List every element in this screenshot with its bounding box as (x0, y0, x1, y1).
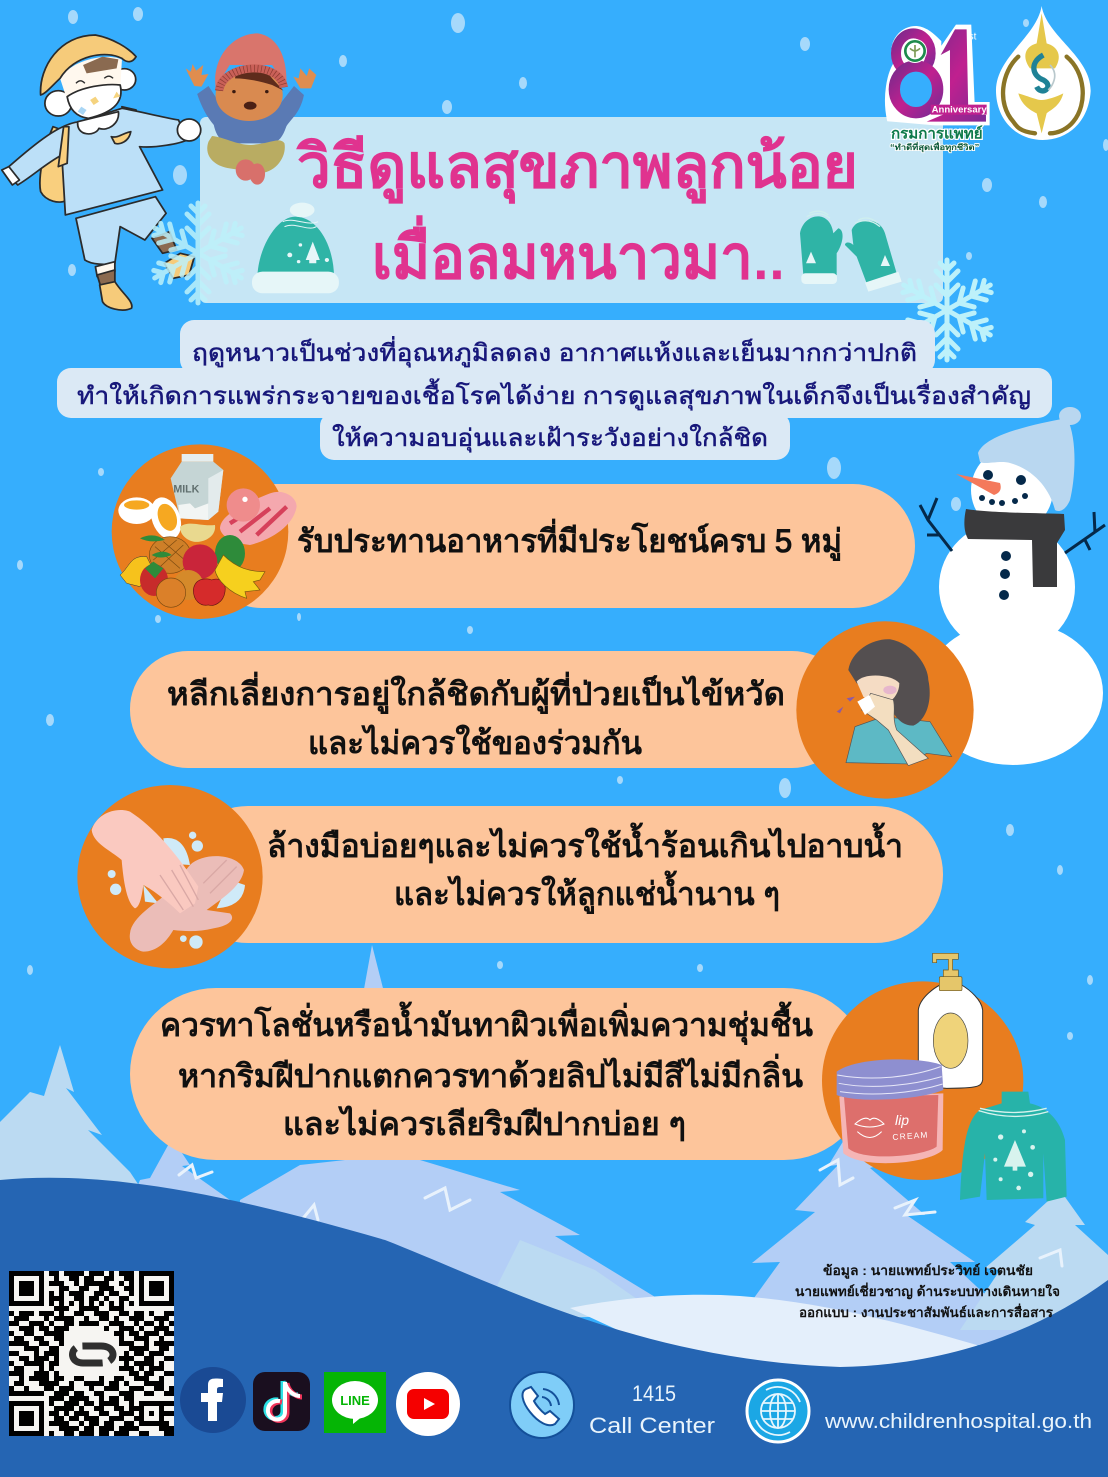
icon: teal mittens (800, 211, 902, 292)
tip 4 text line 1: ควรทาโลชั่นหรือน้ำมันทาผิวเพื่อเพิ่มความชุ่มชื้น (160, 1002, 813, 1045)
teal sweater (960, 1092, 1067, 1202)
lip cream jar: CREAM (892, 1130, 928, 1142)
snowman (920, 407, 1105, 765)
icon: LINE: LINE (340, 1393, 370, 1408)
tip 4 text line 3: และไม่ควรเลียริมฝีปากบ่อย ๆ (283, 1106, 686, 1142)
snowflake right (898, 260, 996, 360)
illustration: walking child with mask (2, 35, 201, 310)
lip cream jar: lip (895, 1112, 909, 1128)
tip 3: pill (180, 806, 943, 943)
icon: globe (747, 1380, 809, 1442)
logo: 81st anniversary department of medical services: กรมการแพทย์ (891, 124, 983, 142)
website address: www.childrenhospital.go.th (824, 1411, 1092, 1433)
tip 1 icon: food groups (112, 444, 297, 619)
tree squiggles (179, 1160, 1062, 1266)
credits text (795, 1263, 1060, 1320)
tip 3 text line 2: และไม่ควรให้ลูกแช่น้ำนาน ๆ (394, 871, 780, 914)
tip 4 icon: lotion, lip cream and sweater (822, 953, 1067, 1202)
intro text panel (57, 320, 1052, 460)
logo: 81st anniversary department of medical services: Anniversary (932, 104, 987, 114)
icon: phone (510, 1372, 574, 1438)
QR code (9, 1271, 174, 1436)
tip 2 text line 2: และไม่ควรใช้ของร่วมกัน (308, 725, 642, 761)
snowy pine trees (0, 945, 1108, 1345)
tip 2: pill (130, 651, 850, 768)
illustration: baby in red hat (186, 33, 316, 185)
title panel (200, 117, 943, 303)
call center label: Call Center (589, 1413, 715, 1438)
icon: teal winter hat (252, 203, 339, 293)
call center number: 1415 (632, 1381, 676, 1406)
tip 2 icon: sneezing woman (796, 621, 974, 799)
icon: tiktok (253, 1372, 310, 1431)
credits text: ออกแบบ : งานประชาสัมพันธ์และการสื่อสาร (799, 1303, 1053, 1320)
icon: youtube (396, 1372, 460, 1436)
bottom wave: white snow (570, 1295, 1000, 1375)
title line 2: เมื่อลมหนาวมา.. (372, 216, 785, 291)
falling snow (17, 7, 1108, 1040)
tip 3 text line 1: ล้างมือบ่อยๆและไม่ควรใช้น้ำร้อนเกินไปอาบน้ำ (267, 823, 903, 864)
tip 4 text line 2: หากริมฝีปากแตกควรทาด้วยลิปไม่มีสีไม่มีกลิ่น (178, 1054, 803, 1094)
intro line 1: ฤดูหนาวเป็นช่วงที่อุณหภูมิลดลง อากาศแห้งและเย็นมากกว่าปกติ (192, 336, 917, 368)
bottom wave: footer band (0, 1178, 1108, 1477)
credits text: ข้อมูล : นายแพทย์ประวิทย์ เจตนชัย (823, 1263, 1033, 1279)
lotion bottle (918, 953, 983, 1088)
tip 1 icon: food groups: MILK (173, 484, 200, 496)
tip 2 text line 1: หลีกเลี่ยงการอยู่ใกล้ชิดกับผู้ที่ป่วยเป็นไข้หวัด (167, 672, 785, 714)
tip 1 text: รับประทานอาหารที่มีประโยชน์ครบ 5 หมู่ (297, 519, 842, 561)
icon: facebook (180, 1367, 246, 1433)
title line 1: วิธีดูแลสุขภาพลูกน้อย (297, 133, 858, 203)
tip 3 icon: washing hands (77, 785, 263, 968)
snowflake left (149, 203, 247, 303)
QR centre logo (72, 1346, 113, 1363)
intro line 2: ทำให้เกิดการแพร่กระจายของเชื้อโรคได้ง่าย การดูแลสุขภาพในเด็กจึงเป็นเรื่องสำคัญ (77, 378, 1031, 411)
logo: 81st anniversary department of medical services (886, 26, 988, 153)
icon: LINE (324, 1372, 386, 1433)
credits text: นายแพทย์เชี่ยวชาญ ด้านระบบทางเดินหายใจ (795, 1282, 1060, 1300)
logo: 81st anniversary department of medical services: “ทำดีที่สุดเพื่อทุกชีวิต” (890, 141, 979, 153)
tip 4: pill (130, 988, 870, 1160)
logo: teardrop emblem (996, 6, 1091, 140)
lip cream jar (837, 1059, 943, 1163)
logo text: st (969, 31, 977, 42)
intro line 3: ให้ความอบอุ่นและเฝ้าระวังอย่างใกล้ชิด (332, 424, 768, 453)
tip 1: pill (200, 484, 915, 608)
